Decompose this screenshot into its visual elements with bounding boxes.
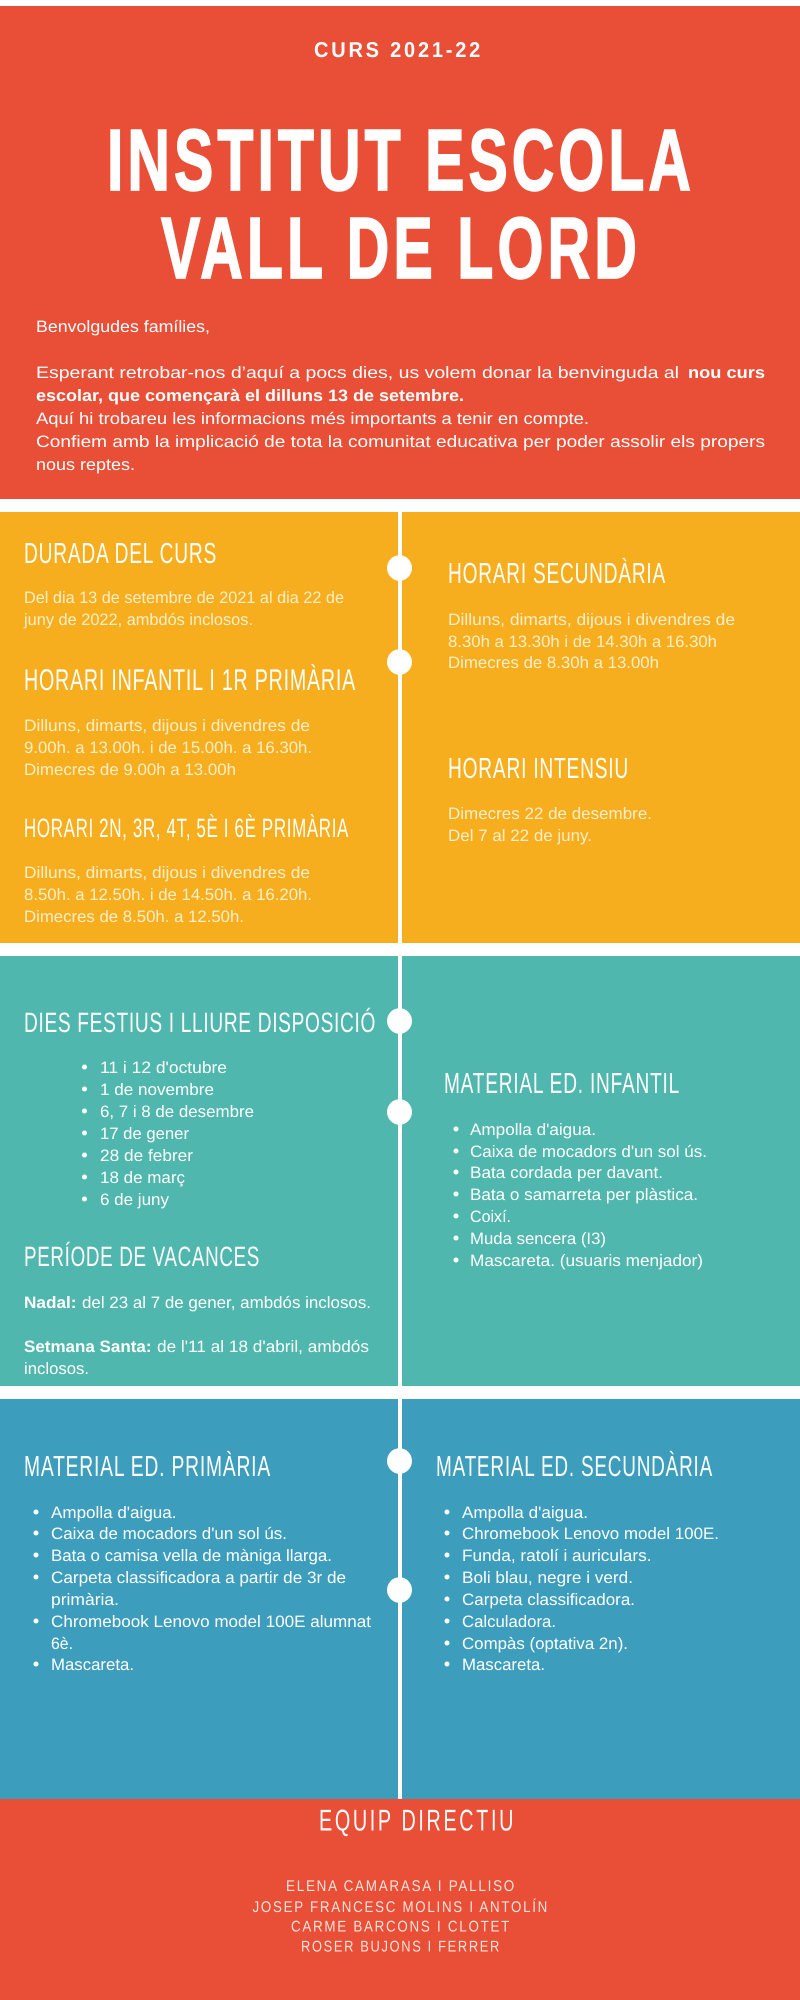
list: secondary materials: Boli blau, negre i verd. [462, 1569, 633, 1587]
list: secondary materials: Carpeta classificadora. [462, 1591, 635, 1609]
subtitle: school year: CURS 2021-22 [314, 38, 483, 62]
list: infant materials: Bata cordada per davant. [470, 1164, 663, 1182]
list: infant materials: Bata o samarreta per plàstica. [470, 1186, 698, 1204]
text: team names: JOSEP FRANCESC MOLINS I ANTOLÍN [252, 1898, 549, 1916]
intro text block: Aquí hi trobareu les informacions més importants a tenir en compte. [36, 410, 589, 428]
heading: intensive schedule: HORARI INTENSIU [448, 753, 629, 785]
heading: infant and first primary schedule: HORARI INFANTIL I 1R PRIMÀRIA [24, 663, 356, 697]
timeline: vertical divider with dots [387, 512, 412, 1799]
list: primary materials: Ampolla d'aigua. [51, 1504, 176, 1522]
text: team names: ELENA CAMARASA I PALLISO [286, 1878, 516, 1895]
list: infant materials: Caixa de mocadors d'un sol ús. [470, 1143, 707, 1161]
list: holidays: 11 i 12 d'octubre [100, 1059, 227, 1077]
list: infant materials: Mascareta. (usuaris menjador) [470, 1252, 703, 1270]
heading: primary schedule: HORARI 2N, 3R, 4T, 5È I 6È PRIMÀRIA [24, 813, 349, 843]
text: infant and first primary schedule [24, 717, 312, 779]
list: infant materials: Muda sencera (I3) [470, 1230, 606, 1248]
text: vacation periods: de l'11 al 18 d'abril, ambdós [157, 1338, 369, 1356]
list: holidays: 18 de març [100, 1169, 185, 1187]
heading: holidays: DIES FESTIUS I LLIURE DISPOSICIÓ [24, 1007, 376, 1038]
text: vacation periods: Nadal: [24, 1294, 76, 1312]
list: primary materials: Mascareta. [51, 1656, 134, 1674]
heading: primary materials: MATERIAL ED. PRIMÀRIA [24, 1450, 271, 1483]
text: course duration: juny de 2022, ambdós inclosos. [23, 611, 253, 629]
text: course duration [23, 589, 344, 629]
heading: secondary schedule: HORARI SECUNDÀRIA [448, 557, 666, 590]
intro text block: nous reptes. [36, 456, 135, 474]
text: intensive schedule: Dimecres 22 de desembre. [448, 805, 652, 823]
text: secondary schedule [448, 611, 735, 672]
text: primary schedule: Dimecres de 8.50h. a 12.50h. [24, 908, 244, 926]
list: primary materials [34, 1504, 371, 1674]
intro text block: Confiem amb la implicació de tota la comunitat educativa per poder assolir els propers [36, 433, 765, 451]
text: secondary schedule: 8.30h a 13.30h i de 14.30h a 16.30h [448, 633, 717, 651]
list: secondary materials: Chromebook Lenovo model 100E. [462, 1525, 719, 1543]
list: holidays: 6 de juny [100, 1191, 170, 1209]
text: intensive schedule [448, 805, 652, 845]
heading: course duration: DURADA DEL CURS [24, 538, 217, 570]
text: primary schedule: 8.50h. a 12.50h. i de 14.50h. a 16.20h. [24, 886, 312, 904]
list: primary materials: Carpeta classificadora a partir de 3r de [51, 1569, 346, 1587]
text: vacation periods [24, 1294, 371, 1378]
list: secondary materials: Funda, ratolí i auriculars. [462, 1547, 652, 1565]
text: primary schedule [24, 864, 312, 926]
list: primary materials: Caixa de mocadors d'un sol ús. [51, 1525, 287, 1543]
panel: holidays and infant materials [0, 956, 800, 1386]
list: primary materials: primària. [51, 1591, 119, 1609]
list: secondary materials [444, 1504, 719, 1674]
panel: primary and secondary materials [0, 1399, 800, 1799]
list: secondary materials: Compàs (optativa 2n). [462, 1635, 628, 1653]
text: team names [252, 1878, 549, 1956]
list: primary materials: Bata o camisa vella de màniga llarga. [51, 1547, 332, 1565]
heading: management team: EQUIP DIRECTIU [319, 1804, 516, 1838]
text: team names: CARME BARCONS I CLOTET [291, 1919, 511, 1936]
intro text block: Esperant retrobar-nos d’aquí a pocs dies, us volem donar la benvinguda al [36, 364, 679, 382]
list: secondary materials: Calculadora. [462, 1613, 556, 1631]
intro text block: nou curs [688, 364, 765, 382]
text: team names: ROSER BUJONS I FERRER [301, 1938, 501, 1956]
list: infant materials [454, 1121, 707, 1270]
list: holidays: 1 de novembre [100, 1081, 214, 1099]
text: infant and first primary schedule: 9.00h. a 13.00h. i de 15.00h. a 16.30h. [24, 739, 312, 757]
text: intensive schedule: Del 7 al 22 de juny. [448, 827, 592, 845]
text: infant and first primary schedule: Dilluns, dimarts, dijous i divendres de [24, 717, 310, 735]
list: primary materials: 6è. [51, 1635, 73, 1653]
text: vacation periods: Setmana Santa: [24, 1338, 152, 1356]
text: secondary schedule: Dimecres de 8.30h a 13.00h [448, 654, 659, 672]
list: infant materials: Ampolla d'aigua. [470, 1121, 596, 1139]
heading: vacation periods: PERÍODE DE VACANCES [24, 1241, 260, 1272]
text: vacation periods: inclosos. [24, 1360, 89, 1378]
panel: schedules [0, 512, 800, 943]
list: secondary materials: Ampolla d'aigua. [462, 1504, 588, 1522]
title [107, 112, 695, 297]
intro text block [36, 318, 765, 474]
text: infant and first primary schedule: Dimecres de 9.00h a 13.00h [24, 761, 236, 779]
list: holidays: 28 de febrer [100, 1147, 194, 1165]
heading: infant materials: MATERIAL ED. INFANTIL [444, 1068, 680, 1100]
intro text block: Benvolgudes famílies, [36, 318, 210, 336]
text: secondary schedule: Dilluns, dimarts, dijous i divendres de [448, 611, 735, 629]
intro text block: escolar, que començarà el dilluns 13 de setembre. [36, 387, 464, 405]
text: vacation periods: del 23 al 7 de gener, ambdós inclosos. [82, 1294, 371, 1312]
panel: management team [0, 1799, 800, 2000]
text: primary schedule: Dilluns, dimarts, dijous i divendres de [24, 864, 310, 882]
text: course duration: Del dia 13 de setembre de 2021 al dia 22 de [24, 589, 344, 607]
list: holidays: 6, 7 i 8 de desembre [100, 1103, 254, 1121]
list: secondary materials: Mascareta. [462, 1656, 545, 1674]
panel: header [0, 6, 800, 499]
list: holidays [82, 1059, 254, 1209]
list: holidays: 17 de gener [100, 1125, 190, 1143]
list: infant materials: Coixí. [470, 1208, 511, 1226]
list: primary materials: Chromebook Lenovo model 100E alumnat [51, 1613, 371, 1631]
